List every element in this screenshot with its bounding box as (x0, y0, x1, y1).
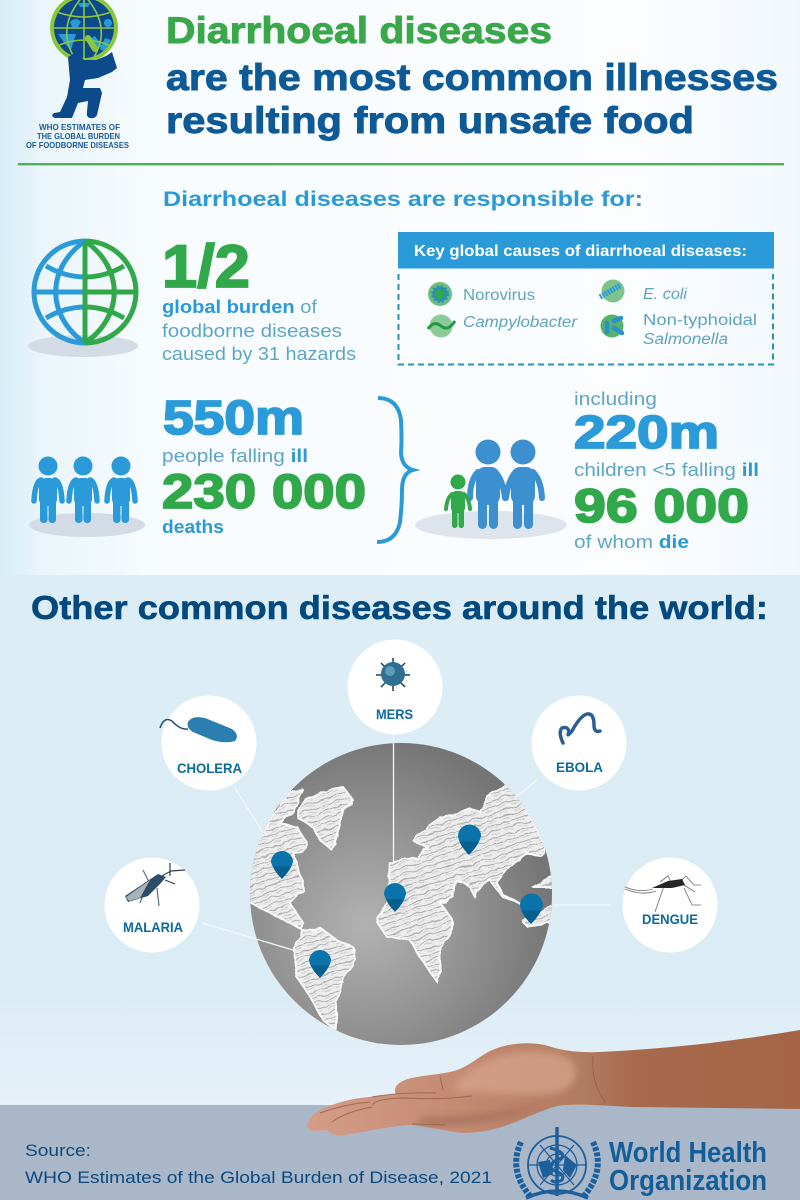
panel: other common diseases (0, 575, 800, 1105)
stat: one half of global burden: caused by 31 hazards (162, 344, 356, 364)
callout: MERS (348, 640, 442, 734)
panel: key global causes (398, 232, 774, 364)
stat: children under five: including (574, 389, 657, 409)
heading: main title: resulting from unsafe food (166, 100, 694, 141)
stat: all ages illness and deaths: 550m (163, 392, 304, 445)
heading: other diseases: Other common diseases around the world: (31, 589, 768, 626)
stat: one half of global burden: global burden of (162, 297, 318, 317)
brace (377, 398, 413, 542)
stat: children under five: 96 000 (574, 479, 749, 532)
list of pathogens: Non-typhoidal (643, 312, 757, 329)
list of pathogens: E. coli (643, 286, 688, 303)
world map globe (245, 743, 556, 1045)
callout: dengue: DENGUE (642, 911, 698, 927)
callout: malaria: MALARIA (123, 919, 183, 935)
callout: malaria (104, 858, 200, 952)
source text (25, 1141, 492, 1187)
icon: dengue mosquito (625, 876, 701, 912)
icon: MERS virus (376, 658, 410, 691)
callout: ebola (532, 696, 626, 790)
icon: ebola virus (560, 714, 600, 743)
callout: dengue (622, 858, 718, 952)
list of pathogens (463, 286, 757, 348)
logo: World Health Organization (516, 1127, 767, 1198)
logo caption: THE GLOBAL BURDEN (37, 131, 120, 141)
map pins (271, 825, 543, 978)
icon: e. coli (600, 280, 624, 302)
heading: main title (166, 10, 778, 141)
stat: one half of global burden: foodborne diseases (162, 321, 342, 341)
stat: children under five: 220m (574, 406, 719, 458)
heading: main title: Diarrhoeal diseases (166, 10, 552, 51)
source text: Source: (25, 1141, 91, 1160)
icon: three people (29, 456, 145, 537)
callout: ebola: EBOLA (556, 759, 603, 775)
emblem (516, 1127, 598, 1198)
logo: World Health Organization: World Health (609, 1137, 767, 1169)
icon: world globe (28, 241, 138, 357)
stat: children under five: of whom die (574, 532, 689, 552)
icon: family with child (415, 440, 567, 539)
stat: all ages illness and deaths (162, 392, 366, 537)
list of pathogens: Campylobacter (463, 314, 578, 331)
icon: campylobacter (428, 314, 455, 338)
panel: key global causes: Key global causes of diarrhoeal diseases: (414, 243, 747, 260)
callout: cholera: CHOLERA (177, 760, 242, 776)
hand photo (307, 1030, 800, 1135)
stat: all ages illness and deaths: 230 000 (162, 466, 366, 519)
heading: main title: are the most common illnesses (166, 57, 778, 98)
list of pathogens: Norovirus (463, 287, 535, 304)
logo caption: WHO ESTIMATES OF (39, 122, 120, 132)
stat: children under five: children <5 falling ill (574, 460, 759, 480)
stat: children under five (574, 389, 759, 552)
icon: malaria mosquito (125, 863, 185, 906)
icon: cholera bacterium (160, 717, 237, 742)
icon: norovirus (428, 282, 452, 306)
panel: foodborne diarrhoeal diseases (0, 0, 800, 575)
logo caption: OF FOODBORNE DISEASES (26, 140, 129, 150)
source text: WHO Estimates of the Global Burden of Disease, 2021 (25, 1168, 492, 1187)
logo: WHO estimates figure holding globe (26, 0, 129, 150)
callout: MERS: MERS (376, 706, 413, 722)
connector lines (202, 735, 610, 950)
logo caption (26, 122, 129, 150)
panel: footer (0, 1030, 800, 1200)
logo: World Health Organization: Organization (609, 1165, 767, 1197)
stat: one half of global burden (162, 233, 356, 364)
icon: salmonella (600, 314, 624, 338)
subheading: Diarrhoeal diseases are responsible for: (163, 188, 643, 211)
stat: all ages illness and deaths: deaths (162, 517, 224, 537)
list of pathogens: Salmonella (643, 331, 728, 348)
callout: cholera (160, 696, 256, 790)
stat: one half of global burden: 1/2 (162, 233, 250, 300)
stat: all ages illness and deaths: people falling ill (162, 446, 308, 466)
